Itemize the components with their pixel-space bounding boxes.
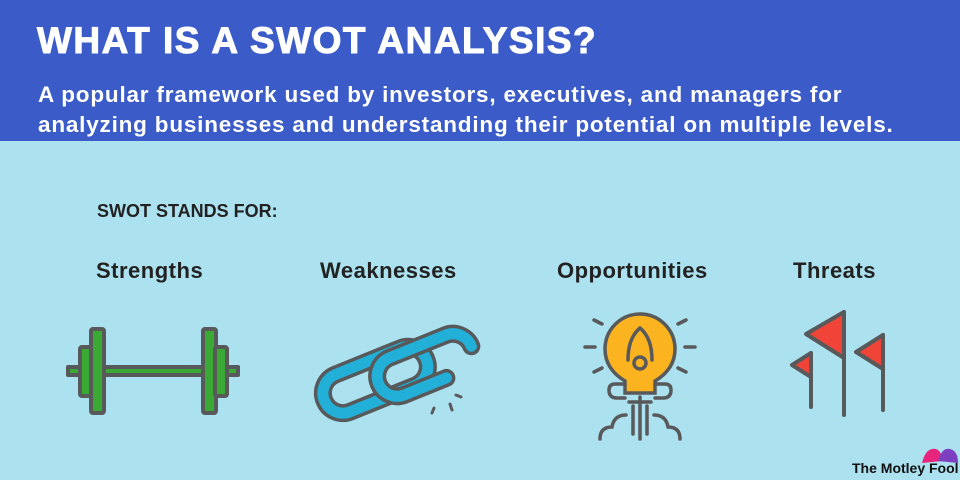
section heading: SWOT STANDS FOR: (97, 201, 278, 221)
icon: lightbulb rocket (585, 314, 695, 439)
icon: broken chain (317, 328, 479, 419)
subtitle: A popular framework used by investors, executives, and managers for (38, 82, 842, 107)
title: WHAT IS A SWOT ANALYSIS? (37, 20, 597, 61)
subtitle: analyzing businesses and understanding their potential on multiple levels. (38, 112, 894, 137)
logo text: The Motley Fool (852, 460, 959, 476)
label: opportunities: Opportunities (557, 258, 708, 283)
logo: jester hat (922, 449, 958, 463)
subtitle (38, 82, 894, 137)
icon: flags (792, 312, 883, 415)
label: strengths: Strengths (96, 258, 203, 283)
icon: barbell (68, 329, 238, 413)
label: weaknesses: Weaknesses (320, 258, 457, 283)
label: threats: Threats (793, 258, 876, 283)
header band (0, 0, 960, 141)
